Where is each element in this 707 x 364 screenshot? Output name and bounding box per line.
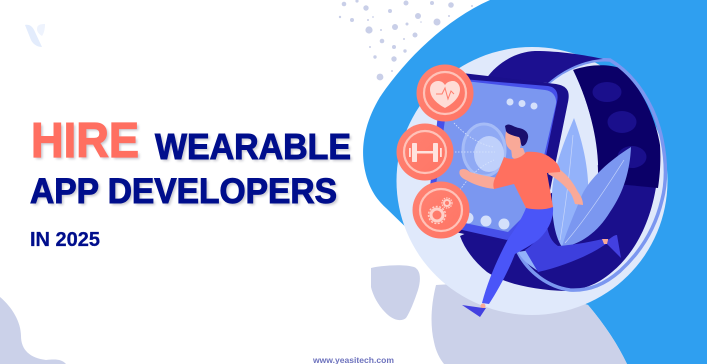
subheading: IN 2025 — [30, 228, 100, 251]
front shoe — [462, 305, 486, 317]
icon: dumbbell — [409, 143, 442, 162]
screen dots — [462, 98, 538, 230]
blue background shape — [363, 0, 707, 364]
heading shadow: HIRE — [33, 116, 141, 170]
icon: gears — [428, 198, 452, 224]
watch band dark interior — [573, 65, 660, 188]
light crescent — [550, 70, 598, 200]
hair — [505, 124, 528, 146]
back leg — [525, 225, 606, 272]
WEARABLE: WEARABLE — [155, 126, 351, 167]
light disc — [396, 47, 668, 315]
logo icon — [25, 24, 45, 47]
heading shadow — [32, 116, 353, 213]
back ankle — [602, 239, 609, 244]
grey blob bottom centre — [432, 280, 627, 364]
smartwatch illustration — [396, 47, 668, 317]
leaf right — [562, 147, 631, 247]
front ankle — [480, 304, 486, 308]
face — [505, 131, 521, 152]
front leg — [482, 207, 553, 304]
back shoe — [607, 235, 621, 258]
right arm — [548, 165, 583, 205]
band dimples — [592, 82, 646, 168]
leaf bottom — [518, 249, 538, 271]
watch band upper strap — [486, 51, 603, 83]
APP DEVELOPERS: APP DEVELOPERS — [30, 172, 337, 211]
badge: heart rate — [416, 64, 474, 122]
shirt — [493, 152, 560, 209]
neck — [511, 148, 526, 160]
speckled dots — [339, 0, 473, 80]
watch frame — [428, 78, 558, 240]
heading shadow: APP DEVELOPERS — [32, 174, 339, 213]
badge: gears — [412, 182, 470, 238]
screen connector lines — [449, 123, 495, 190]
icon: heart — [430, 81, 460, 108]
heading — [30, 114, 353, 213]
hologram centre — [474, 136, 504, 172]
grey blob bottom left — [0, 297, 66, 364]
heading shadow: WEARABLE — [157, 128, 353, 169]
leaf left — [552, 118, 588, 247]
watch band outline — [518, 60, 665, 290]
badge: dumbbell — [396, 124, 454, 180]
HIRE: HIRE — [31, 114, 139, 168]
hologram ring — [463, 124, 505, 176]
leaf veins — [560, 135, 624, 243]
left arm — [459, 169, 500, 189]
watch band lower strap — [460, 165, 657, 291]
grey blob small — [371, 265, 420, 320]
watch body shadow — [430, 73, 569, 243]
watch screen — [434, 81, 556, 232]
